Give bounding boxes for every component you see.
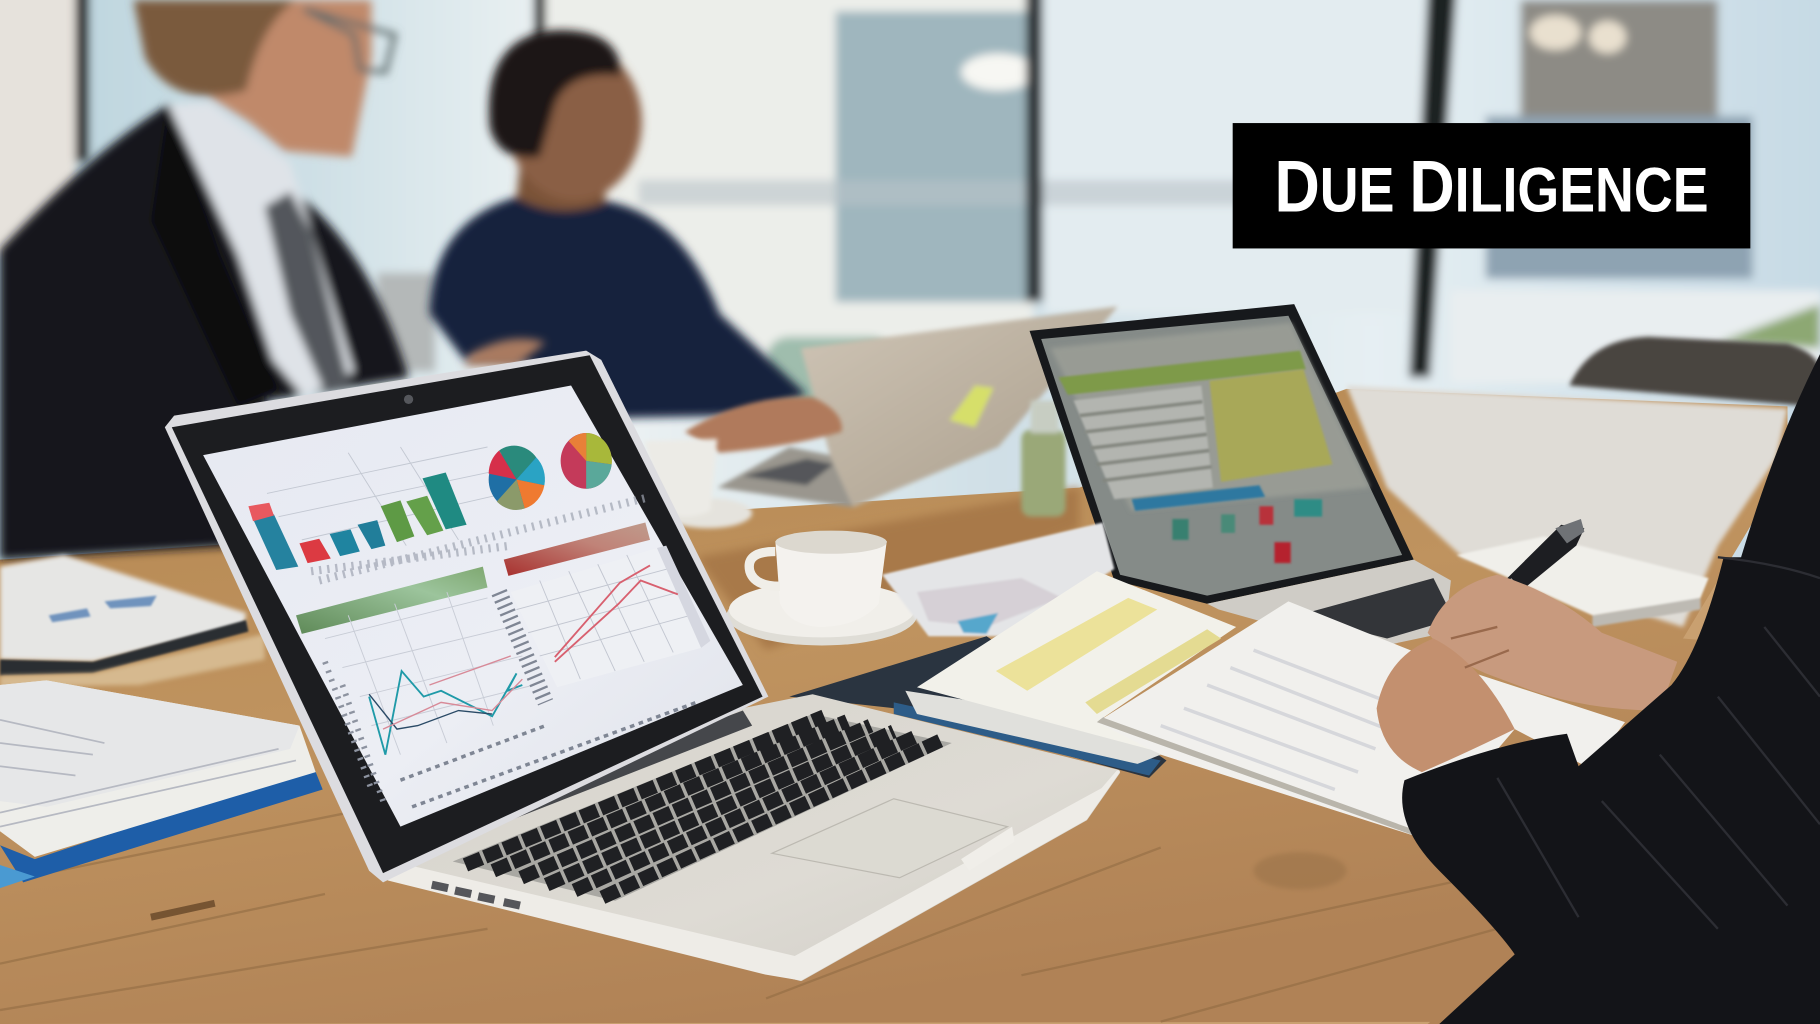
title banner: DUE DILIGENCE <box>1274 146 1709 227</box>
laptop base <box>389 697 1118 979</box>
person: man in black suit <box>0 0 546 560</box>
red banner <box>504 522 650 576</box>
line chart left <box>325 592 696 807</box>
keyboard <box>453 714 952 901</box>
right notebook behind hand <box>1457 536 1709 627</box>
line chart right <box>499 546 710 702</box>
water bottle <box>1021 401 1066 517</box>
back coffee cup <box>644 439 752 528</box>
hand on back laptop <box>685 397 842 453</box>
screen bezel <box>165 351 768 882</box>
chair at back right <box>1569 337 1820 406</box>
hinge <box>439 711 752 845</box>
colorful paper behind documents <box>882 522 1114 636</box>
title banner <box>1233 123 1750 248</box>
background: office windows <box>0 0 1820 569</box>
back left document <box>0 555 265 687</box>
stack of documents with yellow highlights <box>789 571 1236 778</box>
second laptop <box>1030 304 1451 650</box>
trackpad <box>772 799 1008 878</box>
sleeve: dark pinstripe jacket <box>1402 354 1820 1024</box>
open notebook under hand <box>1097 601 1625 838</box>
pen <box>1449 519 1584 641</box>
back laptop <box>717 307 1118 507</box>
person: man in navy shirt <box>429 30 807 418</box>
pie chart left <box>489 446 545 510</box>
hands writing <box>1377 575 1677 772</box>
bar chart <box>248 447 650 580</box>
main laptop <box>165 351 1118 979</box>
pie chart right <box>561 433 612 489</box>
green banner <box>296 567 488 634</box>
table top <box>0 385 1820 1024</box>
left front binder <box>0 680 323 888</box>
foreground coffee cup and saucer <box>727 531 917 646</box>
screen display <box>203 385 743 827</box>
